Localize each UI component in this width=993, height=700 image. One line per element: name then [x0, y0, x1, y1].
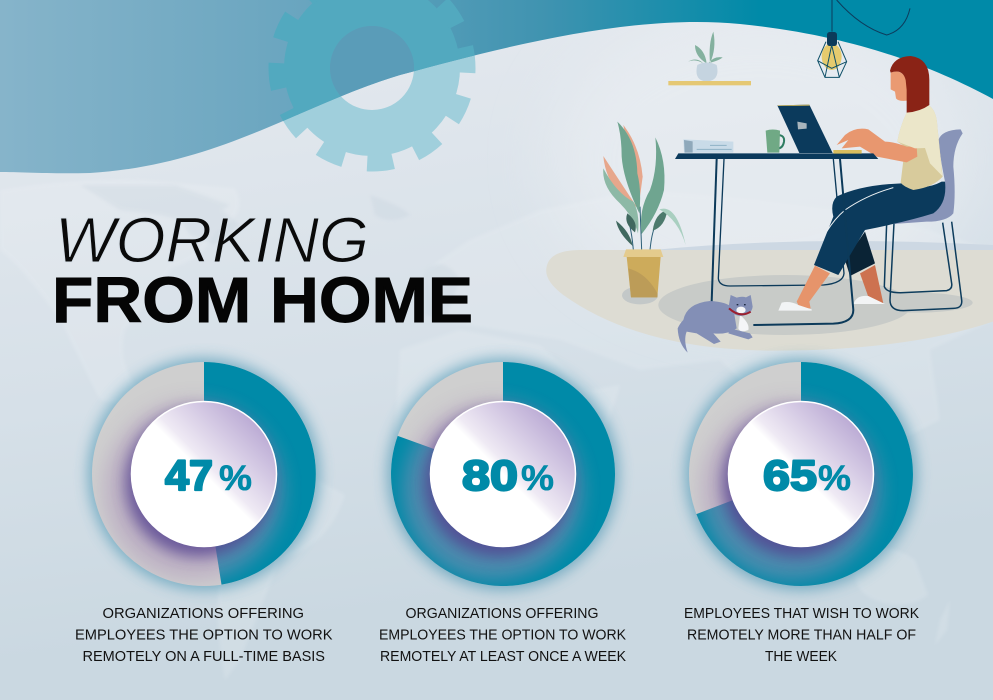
title line 2: FROM HOME — [52, 264, 473, 336]
plant stems — [627, 207, 655, 250]
back slipper — [853, 296, 885, 304]
inner shadow — [104, 400, 284, 580]
gear lower layer — [258, 0, 486, 182]
front leg — [797, 266, 830, 308]
caption 3 — [684, 605, 919, 665]
leaf dark small — [616, 213, 636, 246]
lamp cord — [832, 0, 910, 35]
hair — [890, 56, 929, 113]
pot rim — [623, 249, 663, 257]
table front leg — [753, 159, 853, 325]
value label: 65 — [763, 452, 817, 500]
inner shadow — [701, 400, 881, 580]
shirt upper — [897, 105, 942, 176]
leaf pale right — [659, 209, 686, 245]
bulb — [822, 43, 842, 70]
outer glow — [88, 358, 320, 590]
header wave — [0, 0, 993, 173]
caption 3: EMPLOYEES THAT WISH TO WORK — [684, 605, 919, 622]
caption 1: EMPLOYEES THE OPTION TO WORK — [75, 626, 332, 644]
inner shadow — [403, 400, 583, 580]
cat — [678, 295, 753, 353]
pot shadow — [622, 286, 658, 304]
trouser highlight — [827, 188, 893, 232]
light wash behind illustration — [550, 10, 970, 310]
floor — [546, 250, 993, 351]
face — [891, 71, 907, 101]
title line 1: WORKING — [55, 204, 369, 276]
cat face — [736, 307, 746, 313]
leaf green right tall — [641, 137, 665, 234]
outer glow — [685, 358, 917, 590]
woman — [778, 56, 945, 311]
trousers — [814, 182, 945, 275]
cage — [818, 42, 847, 77]
illustration: home office — [546, 0, 993, 353]
front slipper — [778, 302, 812, 311]
title — [52, 204, 473, 336]
value label: 47 — [165, 452, 213, 500]
remainder ring — [689, 362, 913, 586]
cat chest — [738, 315, 749, 331]
cat head — [729, 295, 753, 316]
remainder ring — [391, 362, 615, 586]
caption 1: ORGANIZATIONS OFFERING — [102, 605, 304, 622]
donut 2: 80% — [387, 358, 619, 590]
chair — [884, 129, 963, 311]
gear — [0, 0, 993, 182]
gear upper layer — [268, 0, 474, 121]
pot body — [627, 257, 661, 297]
table top — [675, 153, 878, 159]
back leg — [860, 265, 883, 303]
donut 3: 65% — [685, 358, 917, 590]
vase — [696, 62, 717, 81]
value arc — [204, 362, 316, 585]
chair shell — [886, 129, 963, 224]
wall strip — [653, 241, 993, 253]
value label — [763, 452, 851, 500]
value label: % — [521, 459, 554, 498]
cat body — [678, 301, 737, 353]
chair shadow — [861, 293, 973, 313]
value label: % — [818, 459, 851, 498]
leaf green left — [603, 168, 638, 233]
rug shadow — [658, 275, 912, 335]
cat eyes — [737, 303, 746, 307]
leaf green tall — [617, 122, 640, 213]
caption 1: REMOTELY ON A FULL-TIME BASIS — [82, 648, 325, 665]
world map backdrop — [0, 180, 993, 680]
mug — [766, 129, 784, 153]
pot shade — [628, 268, 657, 297]
leaf salmon top — [623, 125, 643, 197]
caption 2: REMOTELY AT LEAST ONCE A WEEK — [380, 648, 626, 665]
socket — [827, 32, 837, 46]
chair legs — [884, 222, 962, 311]
dark trouser leg — [845, 232, 875, 276]
leaf dark right — [653, 210, 667, 231]
caption 2: EMPLOYEES THE OPTION TO WORK — [379, 626, 626, 644]
value label — [462, 452, 554, 500]
plant — [603, 122, 686, 297]
centre disc — [728, 402, 874, 546]
pendant lamp — [818, 0, 910, 77]
caption 2: ORGANIZATIONS OFFERING — [406, 605, 598, 622]
centre disc — [430, 402, 576, 546]
shelf — [668, 81, 751, 85]
shirt body — [897, 105, 943, 190]
laptop — [777, 105, 862, 154]
value arc — [391, 362, 615, 586]
donut 1: 47% — [88, 358, 320, 590]
cat paw — [728, 328, 753, 339]
arm — [837, 129, 917, 162]
value label — [165, 452, 252, 500]
value label: 80 — [462, 452, 518, 500]
outer glow — [387, 358, 619, 590]
caption 3: THE WEEK — [765, 648, 837, 665]
papers — [683, 139, 733, 153]
table legs — [712, 159, 844, 302]
value arc — [696, 362, 913, 586]
shelf with plant — [668, 32, 751, 85]
caption 3: REMOTELY MORE THAN HALF OF — [687, 626, 916, 644]
remainder ring — [92, 362, 316, 586]
shelf plant leaves — [688, 32, 723, 63]
caption 1 — [75, 605, 332, 665]
value label: % — [219, 459, 252, 498]
leaf salmon left — [603, 156, 637, 207]
caption 2 — [379, 605, 626, 665]
cat collar — [729, 308, 751, 314]
centre disc — [132, 402, 276, 546]
